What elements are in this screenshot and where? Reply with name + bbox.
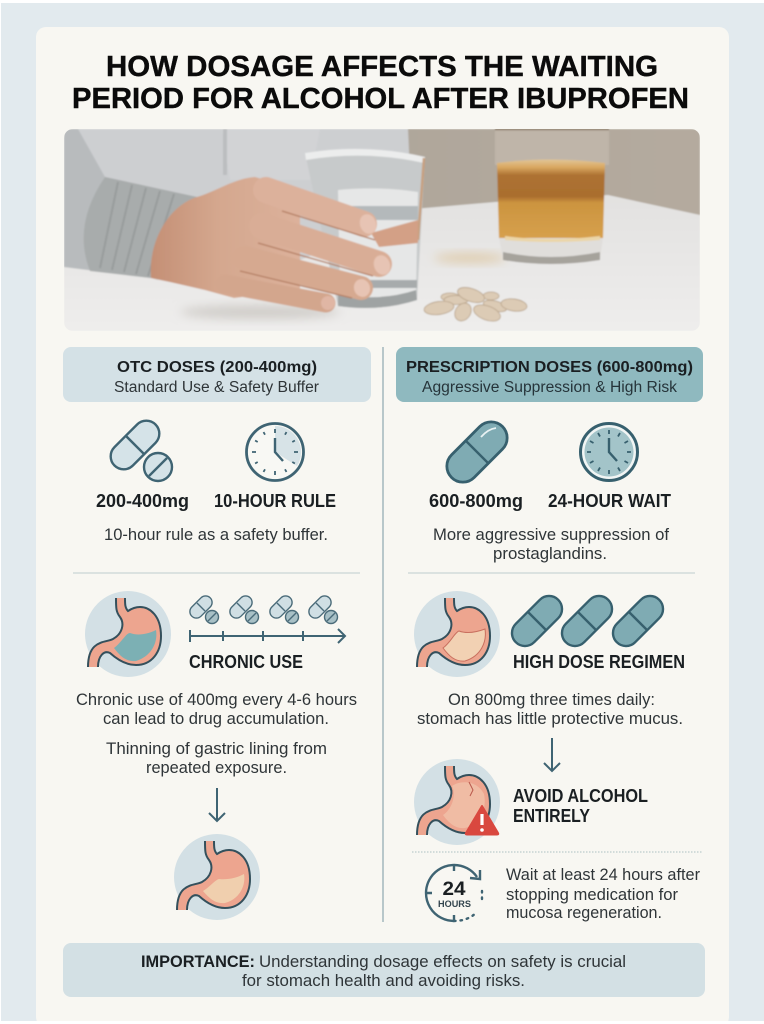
water glass <box>308 160 423 304</box>
icon: capsule and tablet <box>105 415 172 481</box>
avoid alcohol label <box>513 786 648 826</box>
prescription header <box>396 347 703 402</box>
icon: stomach with thinned lining <box>174 834 260 920</box>
OTC header: Standard Use & Safety Buffer <box>114 379 319 396</box>
prescription header: Aggressive Suppression & High Risk <box>422 379 677 396</box>
high dose text: stomach has little protective mucus. <box>417 710 683 728</box>
chronic use label: CHRONIC USE <box>189 652 303 672</box>
dose label: 200-400mg <box>96 491 189 511</box>
thinning text: repeated exposure. <box>146 759 287 777</box>
prescription note: prostaglandins. <box>493 545 607 563</box>
wait text: Wait at least 24 hours after <box>506 866 700 884</box>
wait text: mucosa regeneration. <box>506 904 662 922</box>
title: PERIOD FOR ALCOHOL AFTER IBUPROFEN <box>72 83 689 115</box>
avoid alcohol label: ENTIRELY <box>513 806 590 826</box>
icon: 24 hours timer: HOURS <box>438 899 471 910</box>
arrow down <box>209 788 225 821</box>
icon: three capsules <box>507 591 668 651</box>
sleeve <box>64 129 105 270</box>
prescription note <box>433 526 669 563</box>
title <box>72 51 689 115</box>
OTC header <box>63 347 371 402</box>
OTC note: 10-hour rule as a safety buffer. <box>104 526 328 544</box>
wait text <box>506 866 700 922</box>
callout: importance: Understanding dosage effects on safety is crucial <box>259 953 626 971</box>
central column divider <box>382 347 384 922</box>
high dose text <box>417 691 683 728</box>
icon: 24 hours timer <box>426 865 482 921</box>
wait label: 24-HOUR WAIT <box>548 491 671 511</box>
OTC header: OTC DOSES (200-400mg) <box>117 359 317 376</box>
panel: prescription doses <box>396 347 703 922</box>
high dose label: HIGH DOSE REGIMEN <box>513 652 685 672</box>
high dose text: On 800mg three times daily: <box>448 691 655 709</box>
icon: stomach with little mucus <box>414 591 500 677</box>
hand <box>151 177 418 310</box>
prescription note: More aggressive suppression of <box>433 526 669 544</box>
photo: hand reaching for water glass beside whiskey and pills <box>64 129 700 331</box>
chronic use text <box>76 691 357 728</box>
thinning text <box>106 740 327 777</box>
shadows <box>180 305 340 319</box>
callout: importance <box>63 943 705 997</box>
icon: clock 10 hours <box>246 424 304 480</box>
icon: clock 24 hours <box>580 424 638 480</box>
dose label: 600-800mg <box>429 491 523 511</box>
chronic use text: Chronic use of 400mg every 4-6 hours <box>76 691 357 709</box>
icon: stomach with teal lining <box>85 591 171 677</box>
wait text: stopping medication for <box>506 886 678 904</box>
whiskey glass <box>495 129 609 165</box>
chronic dosing timeline <box>187 593 345 643</box>
thinning text: Thinning of gastric lining from <box>106 740 327 758</box>
panel: OTC doses <box>63 347 371 920</box>
callout: importance: IMPORTANCE: <box>141 953 255 971</box>
prescription header: PRESCRIPTION DOSES (600-800mg) <box>406 359 693 376</box>
torso <box>64 129 412 260</box>
rule label: 10-HOUR RULE <box>214 491 336 511</box>
icon: damaged stomach with warning <box>414 759 500 845</box>
arrow down <box>544 738 560 771</box>
callout: importance: for stomach health and avoiding risks. <box>242 972 525 990</box>
chronic use text: can lead to drug accumulation. <box>103 710 329 728</box>
icon: large capsule <box>440 415 514 489</box>
icon: 24 hours timer: 24 <box>442 879 466 900</box>
pills <box>423 284 528 324</box>
avoid alcohol label: AVOID ALCOHOL <box>513 786 648 806</box>
title: HOW DOSAGE AFFECTS THE WAITING <box>106 51 658 83</box>
